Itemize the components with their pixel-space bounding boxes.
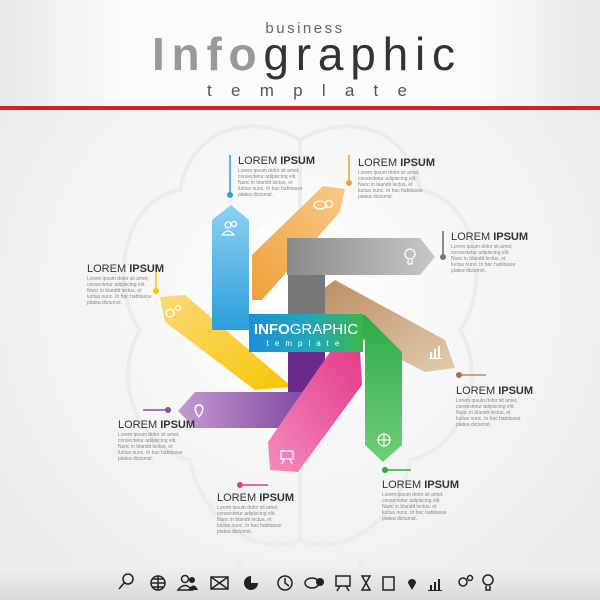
callout: blue: LOREM IPSUM bbox=[238, 155, 315, 167]
callout: green: platea dictumst. bbox=[382, 516, 417, 522]
callout: green: luctus nunc. In hac habitasse bbox=[382, 510, 447, 516]
callout: brown: consectetur adipiscing elit. bbox=[456, 404, 515, 410]
callout: green: LOREM IPSUM bbox=[382, 479, 459, 491]
callout: blue: Nunc in blandit lectus, et bbox=[238, 180, 293, 186]
callout: orange: luctus nunc. In hac habitasse bbox=[358, 188, 423, 194]
header: template: template bbox=[207, 81, 407, 100]
callout: gray: platea dictumst. bbox=[451, 268, 486, 274]
callout: green: consectetur adipiscing elit. bbox=[382, 498, 441, 504]
callout: purple: Lorem ipsum dolor sit amet, bbox=[118, 432, 180, 438]
arm: yellow bbox=[160, 295, 292, 390]
callout: blue: platea dictumst. bbox=[238, 192, 273, 198]
icon: bulb bbox=[405, 249, 415, 264]
pinwheel diagram bbox=[160, 186, 455, 472]
callout: purple: Nunc in blandit lectus, et bbox=[118, 444, 173, 450]
callout: brown: Lorem ipsum dolor sit amet, bbox=[456, 398, 518, 404]
bottom icon bar bbox=[0, 567, 600, 600]
callout: gray: LOREM IPSUM bbox=[451, 231, 528, 243]
center label: template bbox=[267, 339, 345, 348]
arm: brown bbox=[298, 280, 455, 372]
callout: yellow: consectetur adipiscing elit. bbox=[87, 282, 146, 288]
callout: blue: consectetur adipiscing elit. bbox=[238, 174, 297, 180]
header: Infographic: Infographic bbox=[152, 28, 455, 80]
arm: green bbox=[340, 315, 402, 462]
arm: gray bbox=[287, 238, 435, 318]
callout: blue bbox=[227, 155, 315, 198]
callout: purple: LOREM IPSUM bbox=[118, 419, 195, 431]
callout: blue: Lorem ipsum dolor sit amet, bbox=[238, 168, 300, 174]
callout: orange bbox=[346, 155, 435, 200]
arm: purple bbox=[178, 352, 325, 428]
callout: gray: Nunc in blandit lectus, et bbox=[451, 256, 506, 262]
callout: yellow: platea dictumst. bbox=[87, 300, 122, 306]
callout: brown: LOREM IPSUM bbox=[456, 385, 533, 397]
callout: blue: luctus nunc. In hac habitasse bbox=[238, 186, 303, 192]
callout: yellow bbox=[87, 263, 164, 306]
icon: globe bbox=[378, 434, 390, 446]
arm: blue bbox=[212, 205, 249, 330]
icon: chart bbox=[429, 346, 442, 359]
callout: yellow: Nunc in blandit lectus, et bbox=[87, 288, 142, 294]
callout: gray: Lorem ipsum dolor sit amet, bbox=[451, 244, 513, 250]
arm: orange bbox=[252, 186, 345, 300]
callout: brown bbox=[456, 372, 533, 428]
callout: orange: LOREM IPSUM bbox=[358, 157, 435, 169]
callout: brown: luctus nunc. In hac habitasse bbox=[456, 416, 521, 422]
callout: purple: luctus nunc. In hac habitasse bbox=[118, 450, 183, 456]
icon: gears bbox=[166, 306, 180, 317]
callout: purple: platea dictumst. bbox=[118, 456, 153, 462]
callout: orange: consectetur adipiscing elit. bbox=[358, 176, 417, 182]
icon: chat bbox=[314, 200, 332, 209]
callout: yellow: LOREM IPSUM bbox=[87, 263, 164, 275]
callout: orange: platea dictumst. bbox=[358, 194, 393, 200]
callout: orange: Lorem ipsum dolor sit amet, bbox=[358, 170, 420, 176]
callout: purple: consectetur adipiscing elit. bbox=[118, 438, 177, 444]
callout: pink: Lorem ipsum dolor sit amet, bbox=[217, 505, 279, 511]
icon: users bbox=[222, 222, 236, 235]
callout: pink: consectetur adipiscing elit. bbox=[217, 511, 276, 517]
callout: gray bbox=[440, 231, 528, 274]
callout: yellow: Lorem ipsum dolor sit amet, bbox=[87, 276, 149, 282]
brain outline decoration bbox=[124, 126, 476, 600]
header bbox=[0, 0, 600, 110]
icon: presentation bbox=[281, 451, 293, 464]
callout: pink: luctus nunc. In hac habitasse bbox=[217, 523, 282, 529]
callout: orange: Nunc in blandit lectus, et bbox=[358, 182, 413, 188]
callout: pink: platea dictumst. bbox=[217, 529, 252, 535]
callout: purple bbox=[118, 407, 195, 462]
header: business: business bbox=[265, 20, 345, 37]
center label: INFOGRAPHIC bbox=[254, 321, 358, 338]
callout: green: Nunc in blandit lectus, et bbox=[382, 504, 437, 510]
callout: brown: Nunc in blandit lectus, et bbox=[456, 410, 511, 416]
callout: green: Lorem ipsum dolor sit amet, bbox=[382, 492, 444, 498]
callout: pink bbox=[217, 482, 294, 535]
callout: gray: consectetur adipiscing elit. bbox=[451, 250, 510, 256]
callout: brown: platea dictumst. bbox=[456, 422, 491, 428]
callout: gray: luctus nunc. In hac habitasse bbox=[451, 262, 516, 268]
icon: pin bbox=[195, 405, 203, 417]
callout: green bbox=[382, 467, 459, 522]
callout: pink: Nunc in blandit lectus, et bbox=[217, 517, 272, 523]
center label bbox=[249, 314, 363, 352]
callout: yellow: luctus nunc. In hac habitasse bbox=[87, 294, 152, 300]
arm: pink bbox=[268, 350, 362, 472]
callout: pink: LOREM IPSUM bbox=[217, 492, 294, 504]
